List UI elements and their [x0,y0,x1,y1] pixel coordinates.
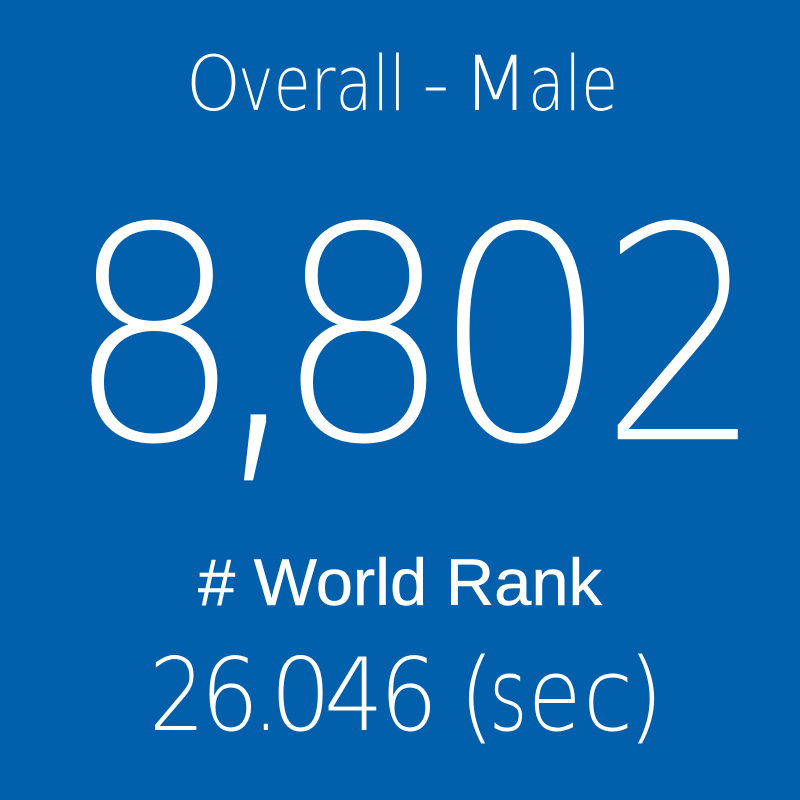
time value: e [528,636,581,754]
time value: 2 [149,636,205,754]
title: M [463,39,529,128]
title: verall [238,39,406,128]
title: O [186,39,241,128]
time value: 0 [270,636,332,754]
time value: ( [459,636,494,754]
big number: world rank value: 8 [273,164,454,511]
label: world rank: # World Rank [198,545,603,619]
time value: c [583,636,633,754]
big number: world rank value: 0 [431,164,611,511]
time value: s [489,636,527,754]
big number: world rank value: , [204,84,313,527]
time value: 6 [201,636,259,754]
title: ale [528,39,618,128]
time value: 4 [324,636,384,754]
time value: 6 [380,636,438,754]
title: - [422,39,449,128]
big number: world rank value: 2 [599,164,764,511]
time value: ) [628,636,664,754]
big number: world rank value: 8 [64,164,245,511]
time value: . [253,636,279,754]
